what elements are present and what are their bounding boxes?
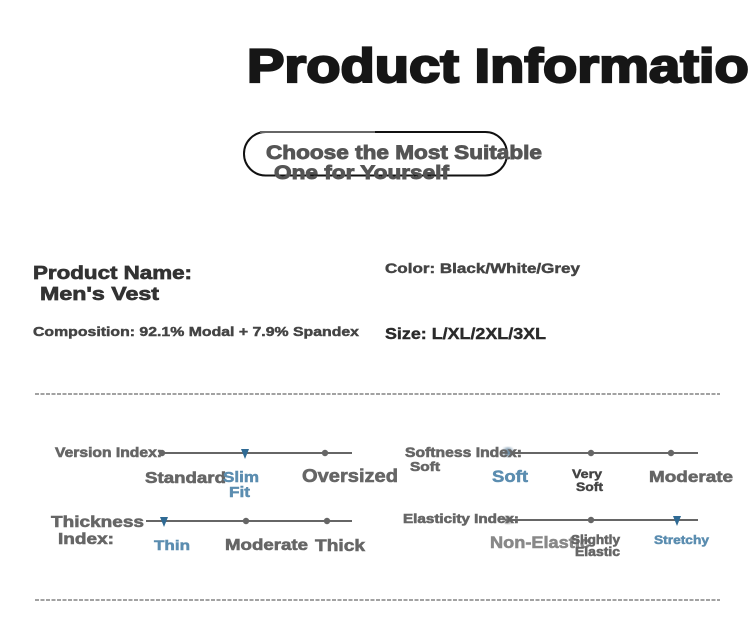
elasticity scale (504, 516, 698, 526)
softness options (492, 467, 733, 494)
version options (145, 466, 398, 501)
color: Color: Black/White/Grey (385, 260, 580, 276)
softness scale (504, 448, 698, 456)
version label: Version Index: (55, 445, 162, 460)
elasticity index (403, 511, 709, 559)
subtitle text (266, 142, 542, 184)
thickness options: Thick (315, 536, 366, 555)
thickness label (51, 514, 144, 548)
thickness options (154, 536, 366, 555)
version options: Slim (223, 469, 259, 486)
elasticity options: Non-Elastic (490, 533, 590, 552)
elasticity options: Elastic (575, 544, 620, 559)
version options: Oversized (302, 466, 398, 486)
softness options: Moderate (649, 469, 733, 486)
softness options: Very (572, 467, 602, 481)
title: Product Information (247, 39, 750, 92)
subtitle text: One for Yourself (274, 162, 450, 184)
softness options: Soft (492, 467, 528, 486)
thickness label: Index: (58, 531, 114, 548)
product name: Men's Vest (40, 283, 159, 304)
softness label: Soft (410, 460, 441, 474)
softness options: Soft (576, 480, 603, 494)
elasticity label: Elasticity Index: (403, 511, 519, 526)
composition: Composition: 92.1% Modal + 7.9% Spandex (33, 324, 360, 339)
version scale (159, 449, 352, 459)
size: Size: L/XL/2XL/3XL (385, 326, 546, 343)
subtitle text: Choose the Most Suitable (266, 142, 542, 164)
thickness index (51, 514, 366, 555)
product name (33, 262, 192, 304)
softness label: Softness Index: (405, 445, 522, 460)
softness index (405, 445, 733, 494)
softness label (405, 445, 522, 474)
version options: Fit (229, 484, 250, 501)
pill outline (244, 132, 507, 176)
elasticity options (490, 532, 709, 559)
thickness options: Thin (154, 537, 190, 553)
version index (55, 445, 398, 501)
thickness scale (146, 517, 352, 527)
version options: Standard (145, 470, 226, 487)
subtitle pill (244, 132, 542, 184)
elasticity options: Stretchy (654, 533, 709, 547)
thickness label: Thickness (51, 514, 144, 531)
product name: Product Name: (33, 262, 192, 283)
thickness options: Moderate (225, 537, 308, 554)
elasticity options: Slightly (571, 532, 621, 547)
